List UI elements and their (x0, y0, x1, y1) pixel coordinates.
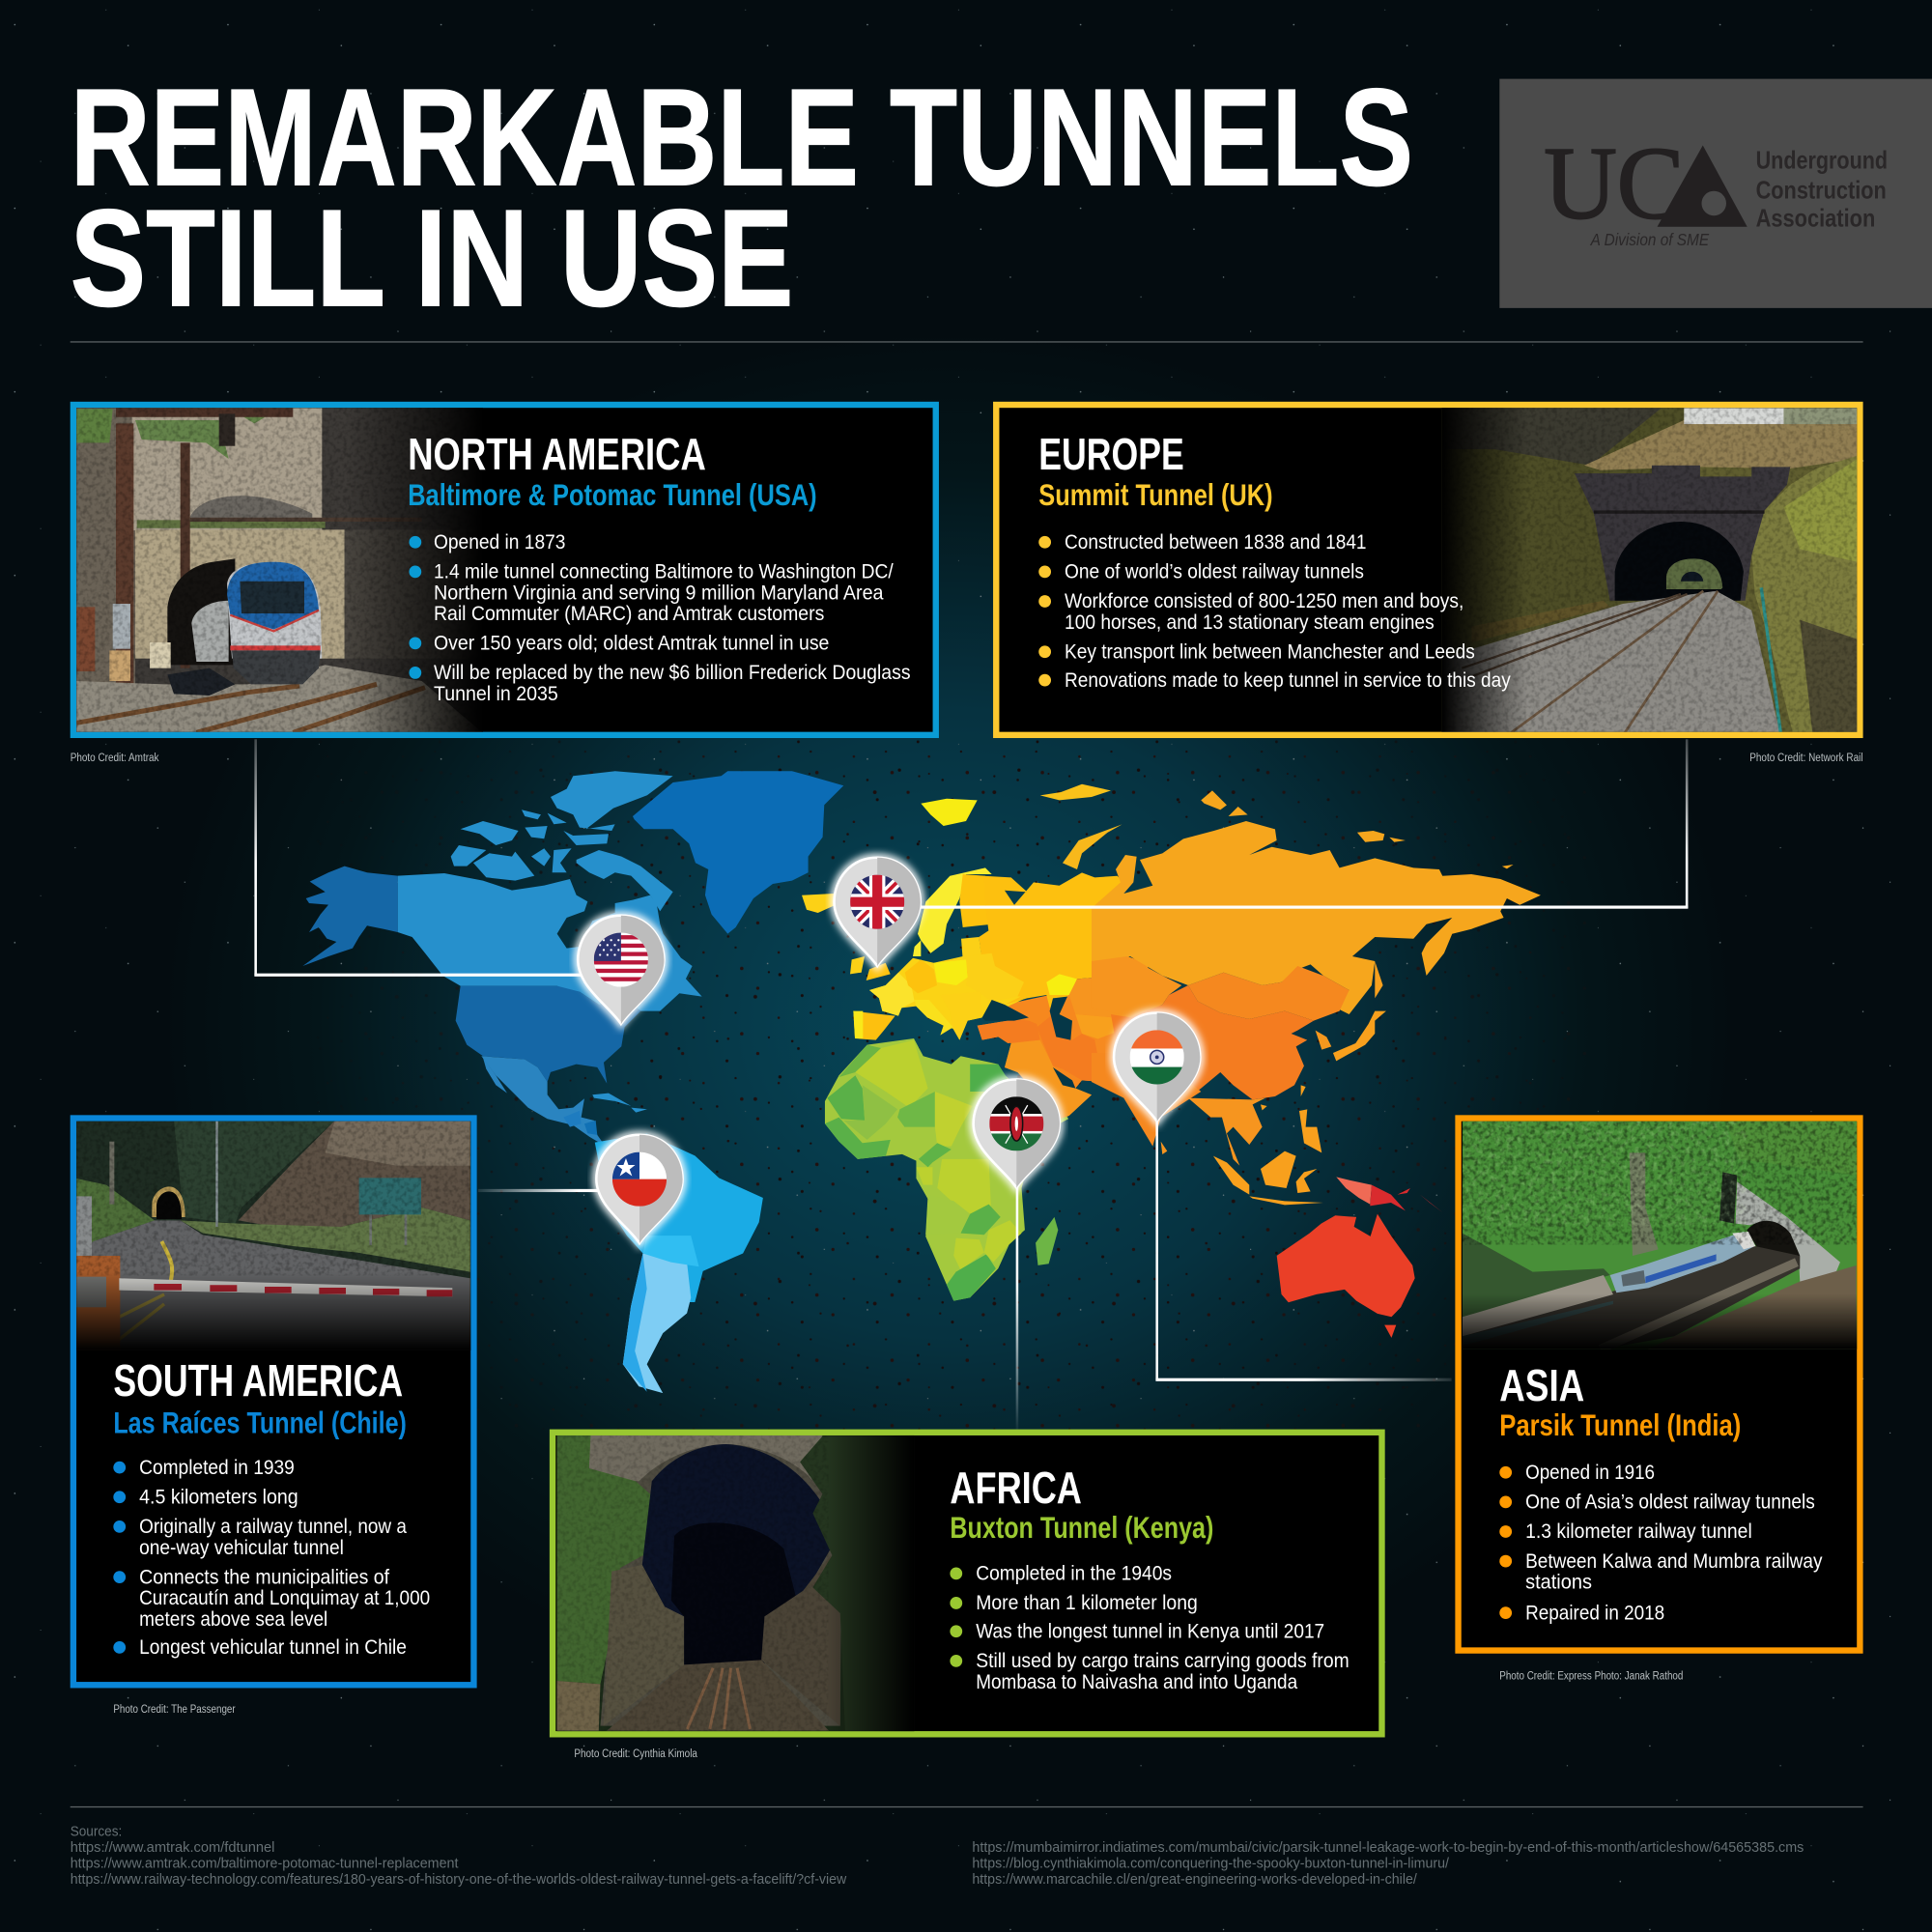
pin: Kenya flag (974, 1079, 1060, 1188)
bullet list: Northern Virginia and serving 9 million Maryland Area (434, 582, 884, 604)
bullet list: 100 horses, and 13 stationary steam engines (1065, 611, 1435, 634)
bullet list: Key transport link between Manchester and Leeds (1065, 641, 1475, 664)
logo panel: Underground Construction Association: UC (1544, 128, 1685, 242)
bullet list: Constructed between 1838 and 1841 (1065, 531, 1367, 554)
connector: North America panel to USA pin (254, 739, 581, 977)
photo: Summit Tunnel (1439, 408, 1861, 736)
photo credit: Network Rail: Photo Credit: Network Rail (1749, 751, 1863, 764)
sources: left column: Sources: (71, 1825, 122, 1840)
connector: Europe panel to UK pin (918, 739, 1688, 909)
world map (302, 739, 1589, 1430)
bullet list: Opened in 1873 (434, 531, 565, 554)
connector: South America panel to Chile pin (478, 1189, 601, 1192)
bullet list: Connects the municipalities of (139, 1566, 389, 1588)
photo fade (1441, 408, 1528, 732)
panel: Europe (996, 405, 1861, 736)
bullet list: 1.3 kilometer railway tunnel (1525, 1520, 1752, 1543)
bullet list: 4.5 kilometers long (139, 1487, 298, 1509)
bullet list: One of world’s oldest railway tunnels (1065, 561, 1364, 583)
title: STILL IN USE (71, 182, 793, 335)
photo: Buxton Tunnel (555, 1433, 916, 1732)
bullet list: Rail Commuter (MARC) and Amtrak customers (434, 603, 824, 625)
pin: Chile flag (596, 1135, 683, 1243)
bullet list: Workforce consisted of 800-1250 men and boys, (1065, 590, 1463, 612)
bullet list: Repaired in 2018 (1525, 1602, 1664, 1624)
logo panel: Underground Construction Association (1499, 79, 1932, 308)
sources: left column (71, 1825, 847, 1888)
map: South America (595, 1133, 763, 1393)
bullet list: Still used by cargo trains carrying goods from (976, 1650, 1350, 1672)
logo panel: Underground Construction Association: Association (1756, 206, 1875, 233)
title (71, 61, 1413, 335)
bullet list (409, 531, 911, 705)
panel: Asia (1459, 1118, 1861, 1651)
photo fade (1463, 1293, 1857, 1350)
bullet list: 1.4 mile tunnel connecting Baltimore to Washington DC/ (434, 561, 894, 583)
sources: right column (972, 1840, 1804, 1888)
subheading: Las Raíces Tunnel (Chile) (113, 1405, 407, 1439)
heading: EUROPE (1038, 429, 1184, 479)
bullet list: one-way vehicular tunnel (139, 1537, 344, 1559)
bullet list: Mombasa to Naivasha and into Uganda (976, 1671, 1297, 1693)
photo credit: The Passenger: Photo Credit: The Passenger (113, 1702, 236, 1716)
bullet list (1038, 531, 1511, 692)
panel: South America (73, 1118, 473, 1685)
bullet list: Will be replaced by the new $6 billion Frederick Douglass (434, 662, 911, 684)
bullet list: stations (1525, 1572, 1592, 1594)
sources: right column: https://blog.cynthiakimola.com/conquering-the-spooky-buxton-tunnel-in-limuru/ (972, 1857, 1450, 1872)
photo: Las Raíces Tunnel (74, 1118, 473, 1365)
heading: ASIA (1499, 1360, 1584, 1410)
bullet list (950, 1563, 1350, 1693)
subheading: Summit Tunnel (UK) (1038, 477, 1273, 512)
photo credit: Cynthia Kimola: Photo Credit: Cynthia Kimola (574, 1747, 697, 1760)
photo fade (345, 408, 483, 732)
photo: train leaving Baltimore tunnel (74, 408, 493, 736)
bullet list: Was the longest tunnel in Kenya until 2017 (976, 1621, 1324, 1643)
bullet list: One of Asia’s oldest railway tunnels (1525, 1492, 1815, 1514)
bullet list: Between Kalwa and Mumbra railway (1525, 1550, 1823, 1573)
logo panel: Underground Construction Association: Construction (1756, 177, 1887, 204)
sources: left column: https://www.amtrak.com/baltimore-potomac-tunnel-replacement (71, 1857, 458, 1872)
bullet list (113, 1457, 430, 1659)
bullet list: meters above sea level (139, 1608, 327, 1631)
heading: SOUTH AMERICA (113, 1355, 403, 1406)
bullet list: Tunnel in 2035 (434, 683, 558, 705)
title: REMARKABLE TUNNELS (71, 61, 1413, 214)
map: Asia and Oceania (1092, 790, 1541, 1212)
bullet list: Curacautín and Lonquimay at 1,000 (139, 1587, 430, 1609)
heading: AFRICA (950, 1463, 1082, 1513)
logo panel: Underground Construction Association: Underground (1756, 148, 1888, 175)
sources: left column: https://www.amtrak.com/fdtunnel (71, 1840, 274, 1856)
map: Africa and Australia (825, 1038, 1415, 1338)
sources: right column: https://mumbaimirror.indiatimes.com/mumbai/civic/parsik-tunnel-leakage-work-to-begin-by-end-of-this-month/articleshow/64565385.cms (972, 1840, 1804, 1856)
subheading: Buxton Tunnel (Kenya) (950, 1510, 1213, 1545)
photo credit: Express Photo: Photo Credit: Express Photo: Janak Rathod (1499, 1669, 1683, 1683)
heading: NORTH AMERICA (408, 429, 706, 479)
bullet list: Renovations made to keep tunnel in service to this day (1065, 669, 1511, 692)
subheading: Parsik Tunnel (India) (1499, 1407, 1741, 1442)
sources: left column: https://www.railway-technology.com/features/180-years-of-history-one-of-the-worlds-oldest-railway-tunnel-gets-a-facelift/?cf-view (71, 1872, 847, 1888)
map: Europe and Middle East (802, 784, 1162, 1119)
logo panel: Underground Construction Association: A Division of SME (1590, 230, 1710, 249)
pin: UK flag (835, 858, 921, 966)
bullet list: More than 1 kilometer long (976, 1592, 1198, 1614)
photo fade (76, 1271, 470, 1350)
bullet list: Longest vehicular tunnel in Chile (139, 1636, 407, 1659)
connector: Asia panel to India pin (1155, 1115, 1452, 1381)
pin: USA flag (578, 916, 665, 1024)
photo: Parsik Tunnel (1459, 1118, 1861, 1352)
photo credit: Amtrak: Photo Credit: Amtrak (71, 751, 159, 764)
panel: North America (73, 405, 936, 736)
photo fade (826, 1435, 914, 1731)
bullet list: Over 150 years old; oldest Amtrak tunnel in use (434, 633, 829, 655)
sources: right column: https://www.marcachile.cl/en/great-engineering-works-developed-in-chile/ (972, 1872, 1418, 1888)
bullet list: Completed in the 1940s (976, 1563, 1172, 1585)
bullet list (1499, 1462, 1823, 1624)
bullet list: Opened in 1916 (1525, 1462, 1655, 1484)
pin: India flag (1114, 1012, 1200, 1122)
bullet list: Originally a railway tunnel, now a (139, 1516, 407, 1538)
panel: Africa (553, 1433, 1381, 1734)
bullet list: Completed in 1939 (139, 1457, 295, 1479)
map: North America (302, 771, 843, 1147)
connector: Africa panel to Kenya pin (1016, 1182, 1018, 1430)
subheading: Baltimore & Potomac Tunnel (USA) (408, 477, 817, 512)
